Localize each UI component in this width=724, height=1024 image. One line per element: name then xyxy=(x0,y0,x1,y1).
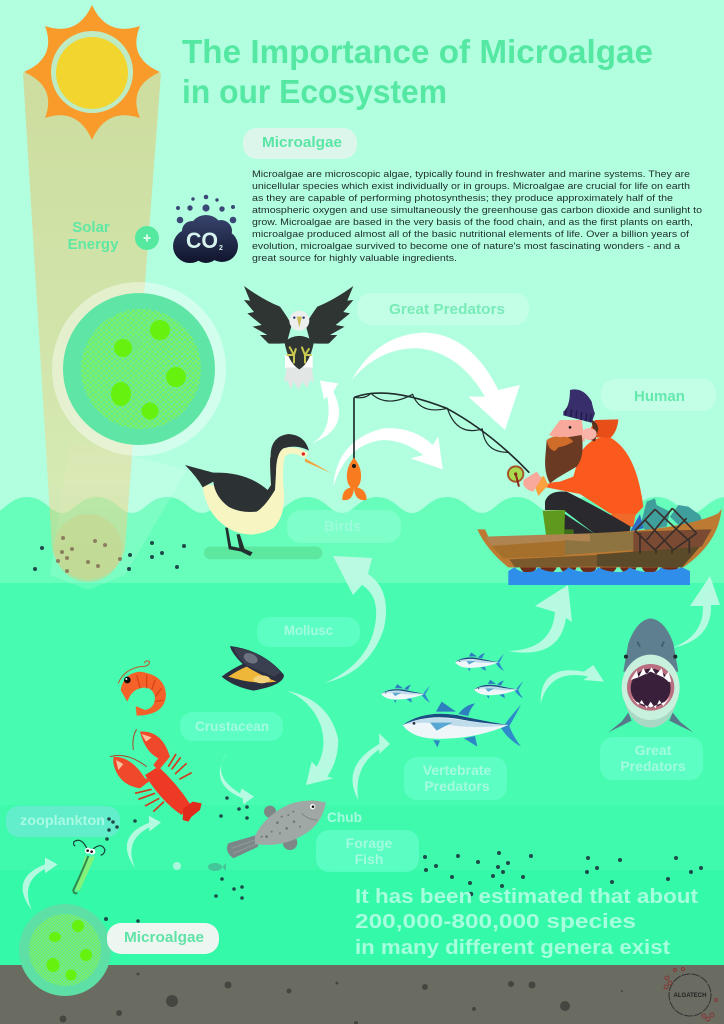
text block: microalgae description: atmospheric oxygen and use simultaneously the greenhouse gas carbon dioxide and sunlight to xyxy=(252,205,702,216)
label: Crustacean xyxy=(180,712,283,741)
label: Mollusc: Mollusc xyxy=(284,622,333,638)
arrow: mollusc to chub xyxy=(287,691,338,785)
icon: CO2 cloud xyxy=(173,195,238,263)
label: Birds xyxy=(287,510,401,543)
label: Microalgae (bottom): Microalgae xyxy=(124,929,204,946)
text block: microalgae description: microalgae produced almost all of the basic nutritional elements of life. Over a billion years of xyxy=(252,229,689,240)
icon: grebe bird xyxy=(185,434,332,559)
label: Forage Fish: Forage xyxy=(346,835,393,851)
icon: net and catch xyxy=(630,498,703,532)
label: Vertebrate Predators xyxy=(404,757,507,800)
icon: lobster xyxy=(110,729,202,822)
light cone from cell to water xyxy=(50,440,187,590)
label: Chub: Chub xyxy=(327,809,362,825)
small dots in the beam xyxy=(56,536,122,573)
label: Forage Fish xyxy=(316,830,419,872)
icon: shark xyxy=(608,618,693,732)
label: Great Predators (sea): Great xyxy=(635,742,672,758)
ground xyxy=(0,965,724,1024)
title xyxy=(182,33,653,110)
icon: eagle xyxy=(244,286,353,390)
callout: species estimate: 200,000-800,000 species xyxy=(355,911,636,933)
arrow: microalgae to zooplankton xyxy=(23,858,58,910)
arrow: vertebrate predators to great predators xyxy=(541,665,604,703)
small dots near seabed xyxy=(104,796,703,923)
small microalgae cell xyxy=(19,904,111,996)
logo: Algatech xyxy=(664,968,718,1021)
arrow: chub to vertebrate predators xyxy=(352,733,390,800)
label: Great Predators (sea) xyxy=(600,737,703,780)
small cell outline in beam xyxy=(54,514,122,582)
small pale bubble and small fish xyxy=(173,862,226,871)
text block: microalgae description xyxy=(252,169,702,264)
label: Human xyxy=(601,379,716,411)
icon: CO2 cloud: CO xyxy=(186,228,218,253)
arrow: great predators to human xyxy=(672,576,720,648)
arrow: vertebrate predators to human xyxy=(508,585,572,653)
label: Microalgae heading pill: Microalgae xyxy=(262,134,342,151)
label: Solar Energy: Energy xyxy=(68,236,119,253)
label: Solar Energy xyxy=(68,219,119,253)
title: The Importance of Microalgae xyxy=(182,33,653,70)
arrow: fish to human xyxy=(333,428,443,487)
label: Vertebrate Predators: Predators xyxy=(424,778,490,794)
arrow: zooplankton to crustacean xyxy=(127,816,161,868)
arrow: birds to great predators over fish xyxy=(352,333,520,430)
text block: microalgae description: grow. Microalgae are based in the very basis of the food chain, and as the first plants on earth, xyxy=(252,217,693,228)
label: Birds: Birds xyxy=(324,518,361,535)
arrow: crustacean to chub xyxy=(220,753,254,804)
ground pebbles xyxy=(60,972,623,1024)
text block: microalgae description: as they are capable of performing photosynthesis; they produce approximately half of the xyxy=(252,193,673,204)
icon: sun xyxy=(24,5,160,140)
icon: boat xyxy=(477,508,722,585)
small dots in the shallow water xyxy=(33,541,186,571)
label: Mollusc xyxy=(257,617,360,647)
label: Human: Human xyxy=(634,388,685,405)
icon: plus xyxy=(135,226,159,250)
callout: species estimate xyxy=(355,886,698,959)
icon: shrimp xyxy=(118,661,166,716)
text block: microalgae description: evolution, microalgae survived to become one of nature's most fascinating wonders - and a xyxy=(252,241,681,252)
label: Crustacean: Crustacean xyxy=(195,718,269,734)
icon: fishing rod and line xyxy=(354,393,529,473)
sun beam xyxy=(23,73,161,579)
title: in our Ecosystem xyxy=(182,73,447,110)
label: Microalgae (bottom) xyxy=(107,923,219,954)
label: Great Predators: Great Predators xyxy=(389,301,505,318)
big microalgae cell xyxy=(52,282,226,456)
label: zooplankton: zooplankton xyxy=(20,812,105,828)
water layers and waves xyxy=(0,497,724,966)
text block: microalgae description: great source for highly valuable ingredients. xyxy=(252,253,457,264)
label: Great Predators (sea): Predators xyxy=(620,758,686,774)
label: Vertebrate Predators: Vertebrate xyxy=(423,762,491,778)
label: Microalgae heading pill xyxy=(243,128,357,159)
callout: species estimate: It has been estimated that about xyxy=(355,886,698,908)
text block: microalgae description: Microalgae are microscopic algae, typically found in freshwater and marine systems. They are xyxy=(252,169,690,180)
arrow: mollusc to birds xyxy=(325,556,386,683)
icon: CO2 cloud: 2 xyxy=(219,245,223,252)
icon: tuna school xyxy=(381,652,523,747)
label: Solar Energy: Solar xyxy=(72,219,110,236)
label: Great Predators xyxy=(357,293,529,325)
label: zooplankton xyxy=(6,806,120,837)
icon: fisherman xyxy=(507,389,643,535)
icon: hanging orange fish xyxy=(342,458,367,500)
icon: zooplankton xyxy=(73,840,105,893)
arrow: bird to eagle xyxy=(312,381,339,443)
icon: chub fish xyxy=(227,800,326,858)
label: Forage Fish: Fish xyxy=(355,851,383,867)
callout: species estimate: in many different genera exist xyxy=(355,937,670,959)
text block: microalgae description: unicellular species which exist individually or in groups. Microalgae are crucial for life on earth xyxy=(252,181,690,192)
logo: Algatech: ALGATECH xyxy=(674,993,706,999)
icon: mussel xyxy=(222,646,284,691)
